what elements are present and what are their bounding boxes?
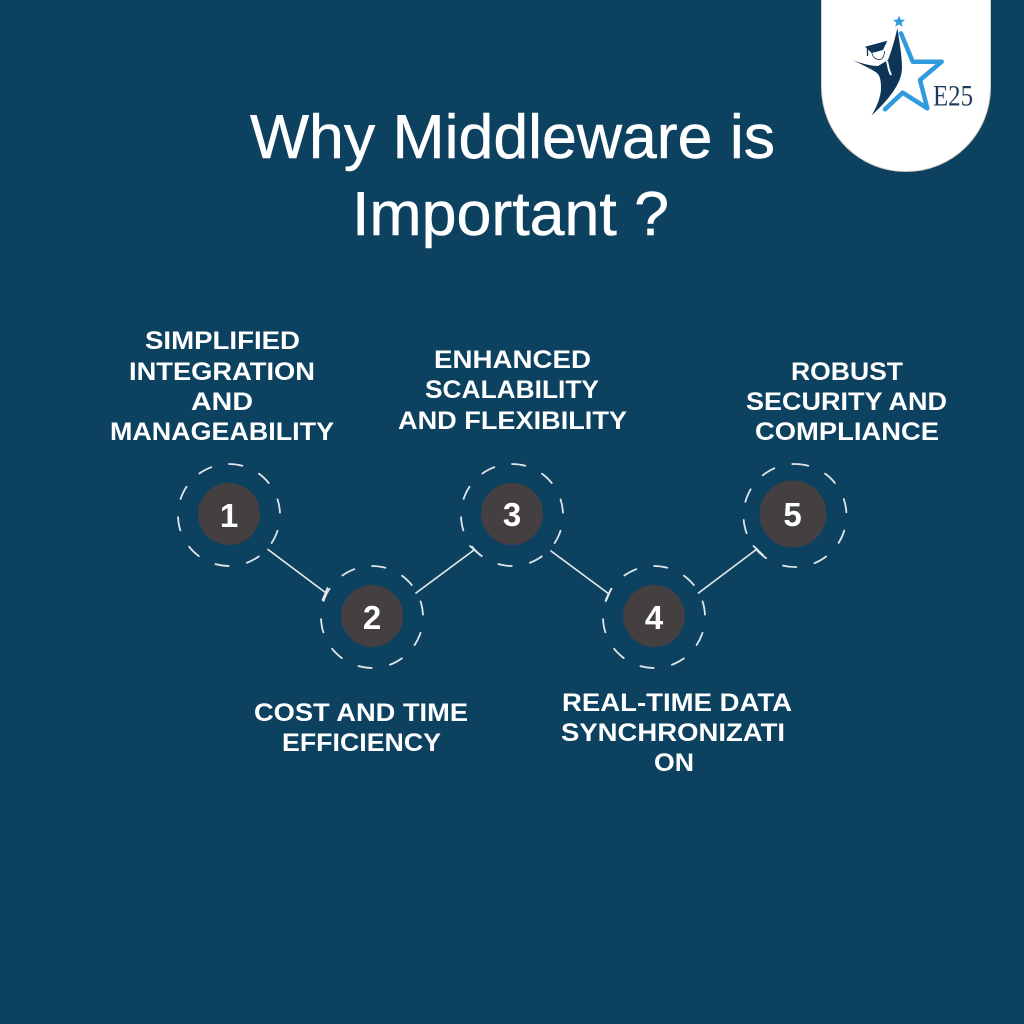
label 1: simplified integration: [110, 327, 334, 446]
arrow: 1 to 2: [268, 550, 328, 600]
label 1: simplified integration: AND: [191, 388, 253, 416]
title: Important ?: [352, 180, 669, 249]
title: [250, 103, 775, 249]
label 3: scalability: SCALABILITY: [425, 376, 599, 404]
label 2: cost and time: [254, 699, 468, 757]
label 1: simplified integration: SIMPLIFIED: [145, 327, 300, 355]
label 4: real-time data: SYNCHRONIZATI: [561, 719, 785, 747]
label 3: scalability: ENHANCED: [434, 346, 591, 374]
label 4: real-time data: ON: [654, 749, 694, 777]
node 1: 1: [220, 497, 238, 534]
label 4: real-time data: REAL-TIME DATA: [562, 689, 792, 717]
icon: logo star outline: [885, 16, 942, 109]
arrow: 4 to 5: [698, 546, 763, 593]
node 2: [321, 566, 423, 668]
label 5: security: [746, 358, 947, 446]
label 5: security: ROBUST: [791, 358, 903, 386]
arrow: 2 to 3: [416, 546, 480, 593]
label 4: real-time data: [561, 689, 792, 777]
node 3: [461, 464, 563, 566]
label 2: cost and time: EFFICIENCY: [282, 729, 441, 757]
label 2: cost and time: COST AND TIME: [254, 699, 468, 727]
label 5: security: COMPLIANCE: [755, 418, 939, 446]
icon: logo graduate figure: [853, 28, 902, 116]
title: Why Middleware is: [250, 103, 775, 172]
node 2: 2: [363, 599, 381, 636]
node 1: [178, 464, 280, 566]
label 1: simplified integration: MANAGEABILITY: [110, 418, 334, 446]
node 5: 5: [783, 496, 802, 533]
label 3: scalability: AND FLEXIBILITY: [398, 407, 627, 435]
label 3: scalability: [398, 346, 627, 435]
arrow: 3 to 4: [551, 551, 611, 601]
node 4: 4: [645, 599, 664, 636]
node 5: [744, 464, 846, 567]
logo text: E25: [933, 80, 973, 112]
node 3: 3: [503, 496, 521, 533]
label 1: simplified integration: INTEGRATION: [129, 358, 315, 386]
logo card: [822, 0, 990, 172]
label 5: security: SECURITY AND: [746, 388, 947, 416]
node 4: [603, 566, 705, 668]
